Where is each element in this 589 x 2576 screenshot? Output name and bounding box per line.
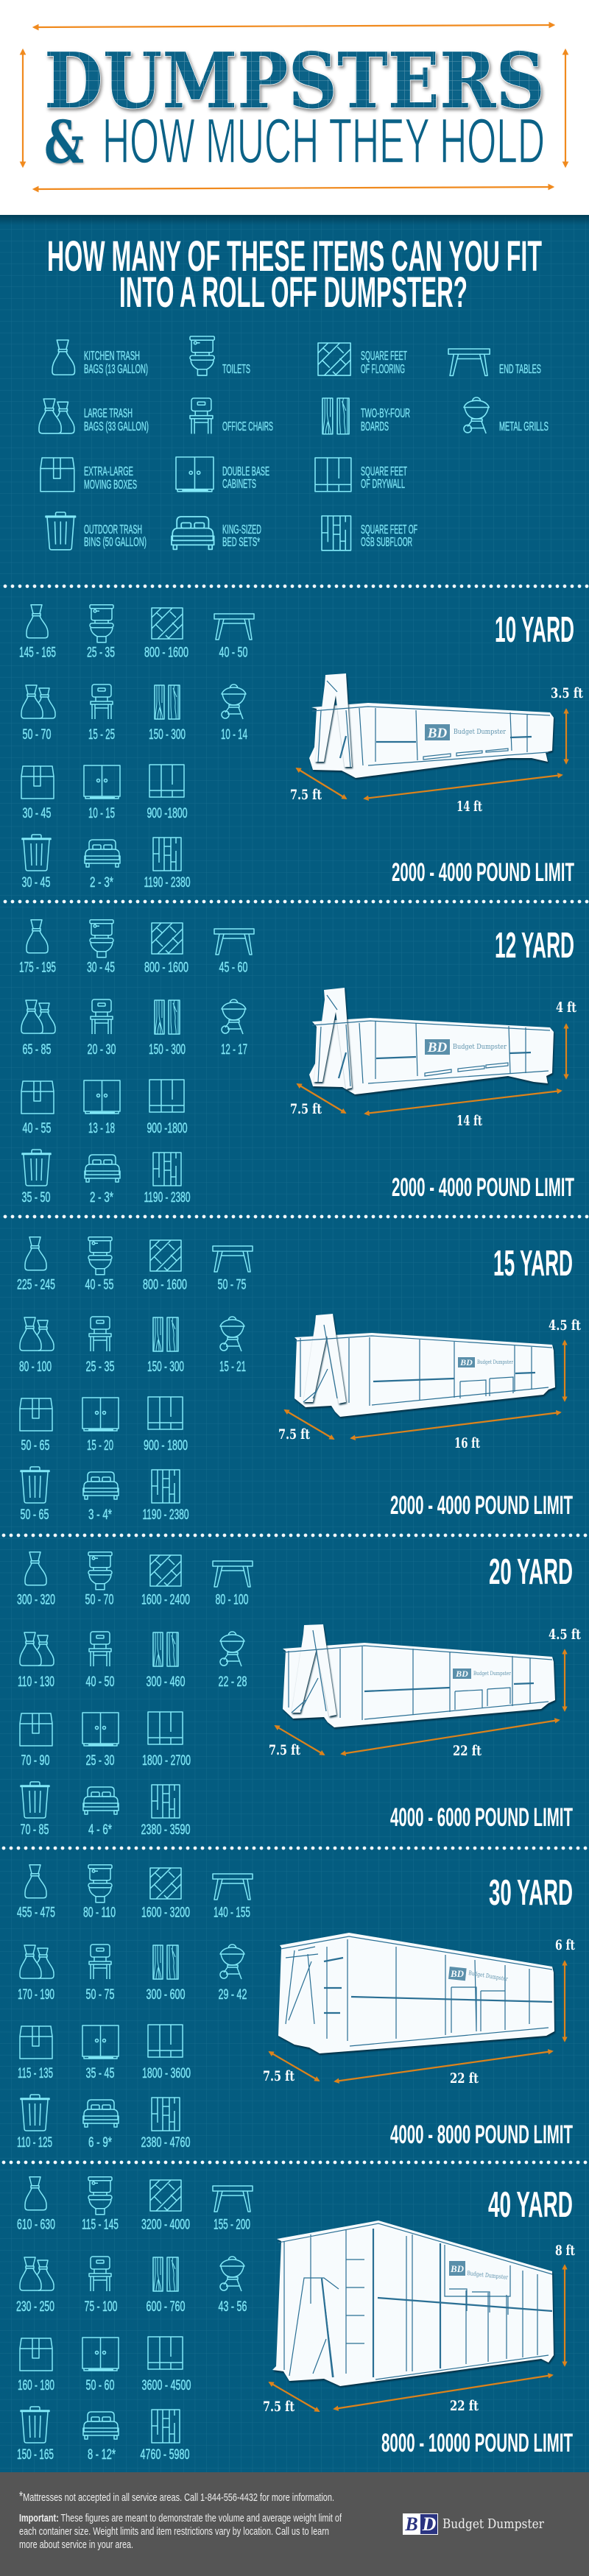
flooring count: 800 - 1600 [144,960,188,976]
osb count: 1190 - 2380 [144,874,191,891]
chairs count [88,684,115,743]
flooring count: 3200 - 4000 [141,2217,190,2233]
boards count [149,1000,186,1058]
dumpster logo: BD [450,2263,465,2274]
legend: outdoor trash bins [46,512,147,550]
end tables count: 45 - 60 [219,960,248,976]
bins count: 30 - 45 [22,874,51,891]
dimension: width [263,2052,319,2084]
dimension: length: 16 ft [454,1435,480,1451]
kitchen bags count: 225 - 245 [17,1277,55,1293]
legend: two-by-four boards: TWO-BY-FOUR [361,406,410,420]
dumpster logo: Budget Dumpster [453,1044,507,1051]
chairs count [85,1632,115,1690]
kitchen bags count: 145 - 165 [19,645,56,661]
chairs count: 50 - 75 [85,1986,115,2003]
boards count: 300 - 460 [146,1674,186,1690]
drywall count: 1800 - 3600 [142,2065,191,2081]
boards count: 600 - 760 [146,2299,186,2315]
dimension: length [334,2375,552,2414]
dumpster illustration: 15 yard [294,1314,555,1417]
dimension: length: 14 ft [456,799,482,815]
dimension: length [351,1412,560,1451]
drywall count: 900 -1800 [147,1120,188,1136]
beds count: 2 - 3* [90,1189,113,1206]
osb count: 1190 - 2380 [143,1507,189,1523]
drywall count [147,1080,188,1136]
osb count [141,2098,191,2151]
cabinets count [82,2338,119,2393]
boxes count [18,2026,53,2081]
osb count [144,838,191,891]
large bags count: 170 - 190 [18,1986,54,2003]
toilets count: 80 - 110 [83,1905,116,1921]
item grid: 20 yard [17,1552,253,1838]
boards count [149,685,186,743]
dumpster logo [458,1357,514,1367]
dumpster logo [425,724,507,741]
kitchen bags count: 175 - 195 [19,960,56,976]
kitchen bags count [17,1237,55,1293]
end tables count: 80 - 100 [215,1592,249,1608]
bins count: 70 - 85 [21,1822,49,1838]
bins count: 50 - 65 [21,1507,49,1523]
dumpster logo: BD [459,1357,473,1367]
legend: two-by-four boards [322,398,410,434]
boards count [146,1632,186,1690]
bins count [21,1467,49,1523]
flooring count [144,923,188,976]
beds count [83,1787,119,1838]
kitchen bags count [17,1865,55,1921]
kitchen bags count [19,920,56,976]
dumpster logo: BD [427,1040,447,1055]
kitchen bags count: 300 - 320 [17,1592,55,1608]
toilets count [83,1865,116,1921]
footnote: * [19,2489,23,2504]
dumpster logo: Budget Dumpster [473,1671,512,1677]
legend: king-sized bed sets: BED SETS* [222,534,260,549]
dumpster logo: BD [427,726,447,741]
drywall count: 1800 - 2700 [142,1752,191,1769]
boards count [146,2257,186,2315]
flooring count [141,2180,190,2233]
background: white header [0,0,589,215]
chairs count [84,2257,118,2315]
cabinets count: 50 - 60 [85,2377,115,2393]
dumpster logo: Budget Dumpster [477,1359,514,1365]
drywall count: 900 - 1800 [144,1437,188,1454]
end tables count [214,929,254,976]
legend: metal grills [464,397,549,434]
dumpster illustration: 40 yard [272,2221,554,2386]
drywall count: 3600 - 4500 [141,2377,191,2393]
beds count [83,1472,119,1523]
legend: moving boxes [40,458,137,492]
disclaimer: more about service in your area. [19,2538,133,2551]
beds count [83,2412,119,2463]
dumpster logo: Budget Dumpster [454,729,507,736]
kitchen bags count: 610 - 630 [17,2217,55,2233]
footnote: Mattresses not accepted in all service areas. Call 1-844-556-4432 for more information. [23,2491,450,2504]
flooring count [141,1555,190,1608]
dimension: height [556,999,576,1078]
end tables count [213,1561,253,1608]
legend: double base cabinets [176,457,269,492]
toilets count [85,1237,114,1293]
flooring count: 800 - 1600 [144,645,188,661]
flooring count: 1600 - 2400 [141,1592,190,1608]
cabinets count: 10 - 15 [88,805,115,821]
section: 30 yard [17,1865,575,2151]
legend: office chairs: OFFICE CHAIRS [222,419,273,434]
cabinets count: 15 - 20 [87,1437,113,1454]
osb count: 4760 - 5980 [140,2446,190,2463]
grills count: 22 - 28 [218,1674,247,1690]
large bags count [16,2257,54,2315]
boards count [146,1945,186,2003]
beds count: 2 - 3* [90,874,113,891]
kitchen bags count: 455 - 475 [17,1905,55,1921]
boxes count: 50 - 65 [21,1437,50,1454]
toilets count: 25 - 35 [87,645,115,661]
dimension: width: 7.5 ft [263,2068,294,2084]
bins count [22,835,51,891]
end tables count: 155 - 200 [214,2217,250,2233]
legend: large trash bags [39,399,149,434]
toilets count: 40 - 55 [85,1277,114,1293]
beds count: 3 - 4* [88,1507,112,1523]
legend: large trash bags: LARGE TRASH [84,406,133,420]
item grid: 40 yard [16,2177,253,2463]
grills count [218,1945,247,2003]
boxes count: 160 - 180 [18,2377,54,2393]
beds count [83,2100,119,2151]
cabinets count: 35 - 45 [85,2065,115,2081]
legend: moving boxes: EXTRA-LARGE [84,464,133,478]
boards count: 300 - 600 [146,1986,186,2003]
legend: outdoor trash bins: BINS (50 GALLON) [84,534,147,549]
legend: outdoor trash bins: OUTDOOR TRASH [84,522,142,537]
grills count [221,999,247,1058]
heading: question [47,233,542,316]
grills count: 29 - 42 [218,1986,247,2003]
bins count: 110 - 125 [17,2134,52,2151]
company logo: B [404,2513,418,2535]
large bags count: 65 - 85 [22,1041,52,1058]
osb count: 2380 - 3590 [141,1822,191,1838]
dumpster logo [449,2261,509,2281]
drywall count [142,1712,191,1769]
dimension: length: 22 ft [450,2398,479,2414]
dimension: width [290,1084,345,1117]
flooring count: 1600 - 3200 [141,1905,190,1921]
beds count [85,1155,120,1206]
osb count [143,1470,189,1523]
osb count [144,1153,191,1206]
legend: king-sized bed sets [172,517,261,549]
dimension: length [364,775,562,815]
dimension: length [342,1720,559,1759]
legend: osb subfloor [322,516,417,551]
osb count: 1190 - 2380 [144,1189,191,1206]
dimension: width: 7.5 ft [290,1101,322,1117]
chairs count: 20 - 30 [87,1041,116,1058]
dimension: length [365,1091,561,1129]
dimension: width [269,1726,324,1758]
toilets count: 50 - 70 [85,1592,114,1608]
panel: footer [0,2472,589,2576]
large bags count [21,685,55,743]
dimension: width: 7.5 ft [269,1742,300,1758]
legend: double base cabinets: CABINETS [222,476,256,491]
disclaimer [19,2512,342,2551]
dumpster logo [425,1039,507,1055]
company logo [403,2513,544,2535]
legend: drywall: OF DRYWALL [361,476,405,491]
grills count: 43 - 56 [218,2299,247,2315]
bins count [17,2407,54,2463]
drywall count [142,2025,191,2081]
flooring count: 800 - 1600 [143,1277,187,1293]
item grid: 15 yard [17,1237,253,1523]
bins count [17,2095,52,2151]
beds count [85,840,120,891]
large bags count: 80 - 100 [19,1359,52,1375]
section: 15 yard [17,1237,581,1523]
grills count [219,1317,246,1375]
legend: office chairs [190,398,273,434]
dimension: width [263,2382,319,2415]
legend: toilets [190,336,250,376]
dumpster illustration: 20 yard [283,1624,555,1727]
section: 20 yard [17,1552,581,1838]
cabinets count [82,1713,119,1769]
dimension: height [549,1627,581,1710]
item grid: 10 yard [19,605,254,891]
drywall count: 900 -1800 [147,805,188,821]
cabinets count: 25 - 30 [85,1752,115,1769]
legend: kitchen trash bags: BAGS (13 GALLON) [84,361,148,376]
beds count: 8 - 12* [88,2446,116,2463]
boxes count: 70 - 90 [21,1752,50,1769]
dumpster illustration: 12 yard [309,988,554,1094]
company logo: Budget Dumpster [442,2516,544,2532]
chairs count [87,999,116,1058]
cabinets count [82,2025,119,2081]
grills count: 10 - 14 [221,726,247,743]
beds count: 6 - 9* [88,2134,112,2151]
chairs count [85,1317,115,1375]
dimension: height: 4.5 ft [549,1627,581,1643]
large bags count [18,1945,54,2003]
dimension: width: 7.5 ft [290,787,322,803]
grills count [218,2257,247,2315]
chairs count: 15 - 25 [88,726,115,743]
legend: large trash bags: BAGS (33 GALLON) [84,419,149,434]
dumpster logo: BD [455,1669,468,1679]
legend: flooring: OF FLOORING [361,361,405,376]
company logo: D [422,2513,437,2535]
flooring count [141,1868,190,1921]
grills count: 12 - 17 [221,1041,247,1058]
osb count: 2380 - 4760 [141,2134,191,2151]
title frame arrows [23,25,565,189]
legend: metal grills: METAL GRILLS [499,419,549,434]
drywall count [147,765,188,821]
dumpster illustration: 30 yard [278,1933,554,2053]
toilets count [87,605,115,661]
beds count: 4 - 6* [88,1822,112,1838]
dimension: height [551,685,583,763]
toilets count [87,920,115,976]
item grid: 30 yard [17,1865,253,2151]
dimension: length: 22 ft [450,2070,479,2087]
drywall count [141,2337,191,2393]
legend: toilets: TOILETS [222,361,250,376]
large bags count [18,1632,54,1690]
osb count [140,2410,190,2463]
end tables count [213,1874,253,1921]
disclaimer: each container size. Weight limits and item restrictions vary by location. Call us to learn [19,2525,329,2538]
boxes count: 115 - 135 [18,2065,53,2081]
kitchen bags count [19,605,56,661]
dimension: width [278,1410,334,1443]
boxes count [21,1081,54,1136]
dimension: height [549,1317,581,1401]
section: 40 yard [16,2177,575,2463]
bins count: 150 - 165 [17,2446,54,2463]
legend: kitchen trash bags: KITCHEN TRASH [84,348,140,363]
large bags count: 50 - 70 [22,726,52,743]
grills count [221,684,247,743]
large bags count [21,1000,55,1058]
large bags count [19,1317,54,1375]
boxes count [21,766,54,821]
dumpster logo [448,1967,509,1982]
toilets count: 115 - 145 [82,2217,119,2233]
large bags count: 230 - 250 [16,2299,54,2315]
boards count: 150 - 300 [147,1359,184,1375]
end tables count [213,2186,253,2233]
bins count: 35 - 50 [22,1189,51,1206]
dimension: height: 4.5 ft [549,1317,581,1334]
dimension: width: 7.5 ft [278,1426,310,1443]
bins count [21,1782,49,1838]
cabinets count: 13 - 18 [88,1120,115,1136]
dumpster logo [453,1669,512,1679]
dimension: length: 14 ft [456,1113,482,1129]
boxes count: 30 - 45 [22,805,52,821]
boards count [147,1317,184,1375]
panel: legend [39,336,549,551]
chairs count: 75 - 100 [84,2299,118,2315]
legend: two-by-four boards: BOARDS [361,419,389,434]
boxes count [20,1398,52,1454]
legend: end tables: END TABLES [499,361,541,376]
flooring count [144,608,188,661]
legend: flooring: SQUARE FEET [361,348,407,363]
legend: kitchen trash bags [52,340,148,376]
drywall count [144,1397,188,1454]
cabinets count [82,1398,119,1454]
toilets count [82,2177,119,2233]
end tables count [214,614,254,661]
dimension: length: 22 ft [453,1743,482,1759]
title block [23,25,565,189]
section: 10 yard [19,605,583,891]
legend: king-sized bed sets: KING-SIZED [222,522,261,537]
boards count: 150 - 300 [149,726,186,743]
dumpster logo: Budget Dumpster [468,1970,509,1982]
bins count [22,1150,51,1206]
legend: moving boxes: MOVING BOXES [84,477,137,492]
boards count: 150 - 300 [149,1041,186,1058]
dumpster illustration: 10 yard [309,673,554,778]
end tables count: 40 - 50 [219,645,248,661]
dimension: height: 8 ft [555,2243,575,2259]
subtitle ampersand: & [44,107,84,177]
legend: osb subfloor: SQUARE FEET OF [361,522,417,537]
chairs count: 25 - 35 [85,1359,115,1375]
large bags count: 110 - 130 [18,1674,54,1690]
toilets count [85,1552,114,1608]
dimension: width: 7.5 ft [263,2399,294,2415]
end tables count: 50 - 75 [218,1277,247,1293]
end tables count [213,1246,253,1293]
kitchen bags count [17,1552,55,1608]
dumpster logo: Budget Dumpster [467,2270,509,2281]
legend: drywall: SQUARE FEET [361,464,407,478]
dimension: height: 6 ft [555,1937,575,1953]
toilets count: 30 - 45 [87,960,115,976]
grills count [218,1632,247,1690]
chairs count [85,1945,115,2003]
cabinets count [84,765,120,821]
dimension: height: 4 ft [556,999,576,1016]
dumpster logo: BD [450,1968,465,1979]
dimension: width [290,768,346,803]
boxes count [20,1713,52,1769]
grills count: 15 - 21 [219,1359,246,1375]
item grid: 12 yard [19,920,254,1206]
legend: drywall [315,458,407,492]
boxes count [18,2338,54,2393]
kitchen bags count [17,2177,55,2233]
boxes count: 40 - 55 [22,1120,52,1136]
flooring count [143,1240,187,1293]
cabinets count [84,1080,120,1136]
chairs count: 40 - 50 [85,1674,115,1690]
osb count [141,1785,191,1838]
section: 12 yard [19,920,576,1206]
legend: end tables [448,349,541,376]
legend: double base cabinets: DOUBLE BASE [222,464,269,478]
dimension: length [335,2051,552,2087]
legend: osb subfloor: OSB SUBFLOOR [361,534,412,549]
end tables count: 140 - 155 [214,1905,250,1921]
legend: flooring [318,343,407,376]
disclaimer: Important: These figures are meant to demonstrate the volume and average weight limit of [19,2512,342,2524]
